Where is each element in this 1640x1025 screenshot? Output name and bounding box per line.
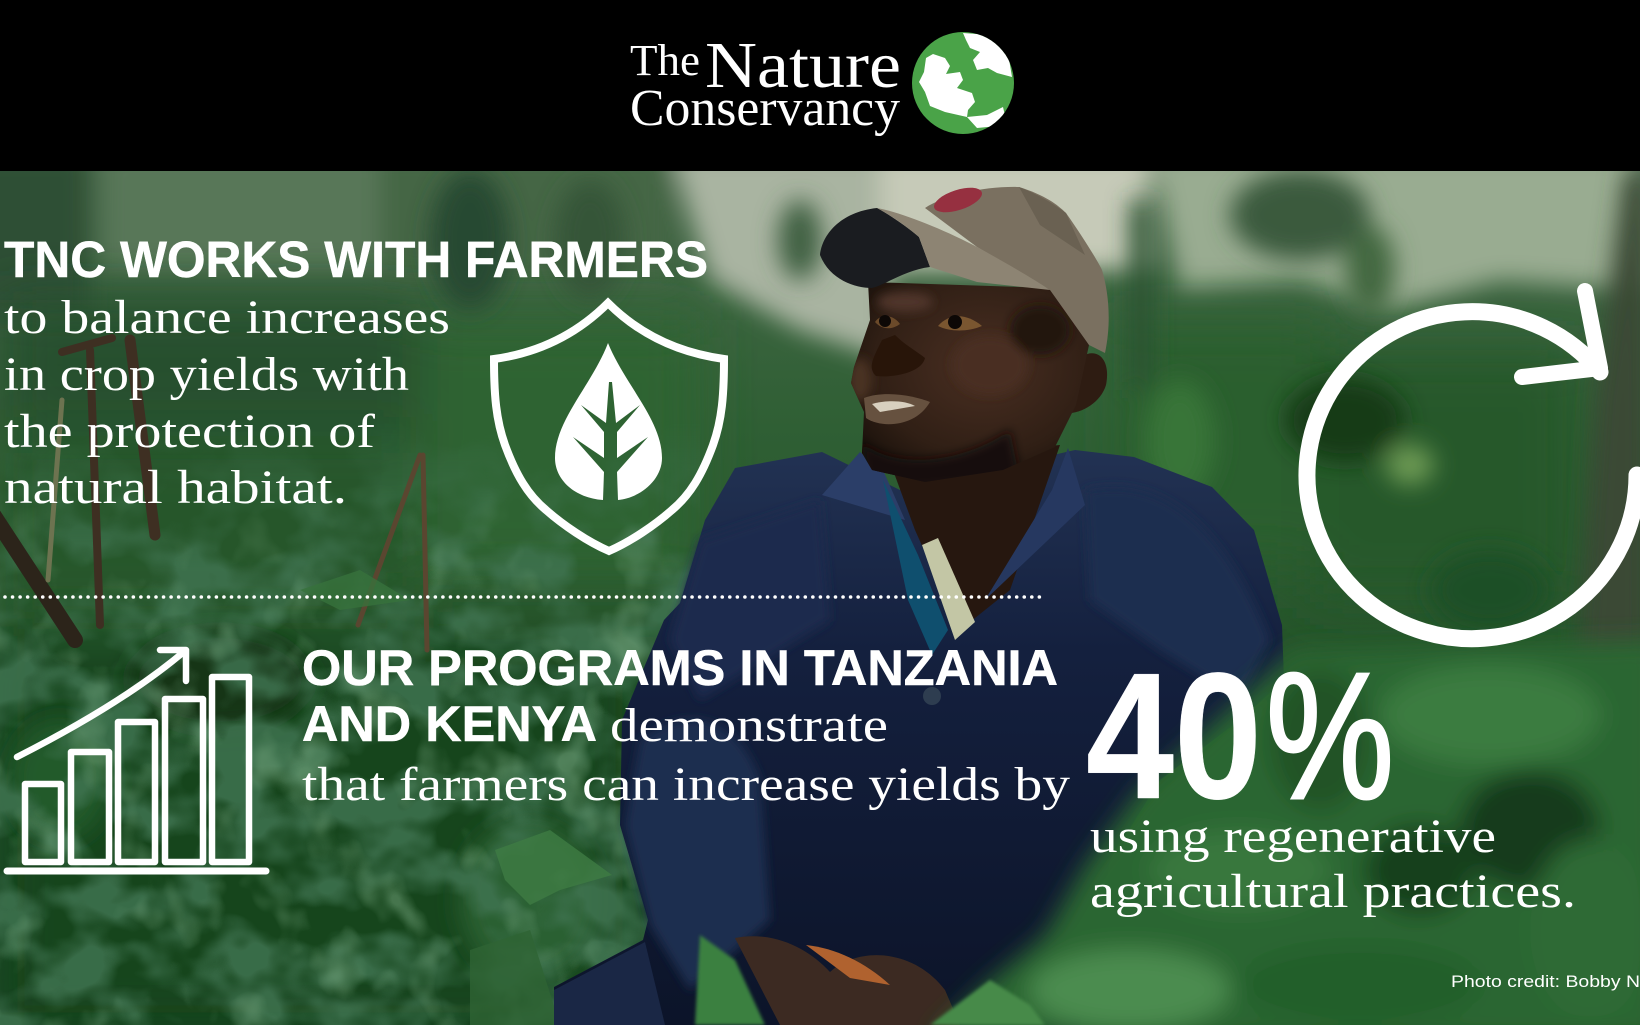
text block: balance yields and habitat [4, 291, 450, 514]
photo credit: Photo credit: Bobby N [1451, 972, 1640, 991]
crisp leaves [300, 570, 612, 1025]
logo: The Nature Conservancy: Nature [705, 29, 901, 102]
stakes [0, 338, 427, 650]
icon: shield with leaf [494, 303, 724, 551]
collar [822, 452, 905, 520]
logo: The Nature Conservancy: Conservancy [630, 80, 900, 137]
divider: dotted line [5, 595, 1040, 599]
heading: TNC works with farmers: TNC WORKS WITH FARMERS [4, 231, 708, 288]
text block: programs in Tanzania and Kenya: OUR PROGRAMS IN TANZANIA [302, 640, 1058, 696]
cap [820, 183, 1109, 353]
text block: balance yields and habitat: natural habitat. [4, 461, 347, 514]
text block: regenerative practices: agricultural practices. [1090, 865, 1576, 918]
neck [890, 445, 1060, 630]
farmer [554, 183, 1284, 1025]
shirt placket [883, 480, 948, 655]
text block: regenerative practices: using regenerative [1090, 810, 1496, 863]
ear [1072, 353, 1108, 413]
text block: programs in Tanzania and Kenya [302, 640, 1070, 811]
logo: The Nature Conservancy [630, 29, 1014, 137]
icon: circular arrow [1307, 291, 1637, 639]
statistic: 40%: 40 [1086, 636, 1262, 837]
text block: programs in Tanzania and Kenya: demonstrate [610, 699, 888, 752]
lit sleeve and shoulder [625, 487, 1270, 990]
button [923, 687, 941, 705]
statistic: 40%: % [1266, 636, 1394, 837]
text block: balance yields and habitat: to balance increases [4, 291, 450, 344]
head [851, 282, 1089, 482]
icon: rising bar chart [7, 650, 266, 871]
logo: The Nature Conservancy: The [630, 36, 700, 85]
foreground foliage [695, 640, 1640, 1025]
header bar [0, 0, 1640, 171]
text block: programs in Tanzania and Kenya: AND KENYA [302, 696, 597, 752]
text block: balance yields and habitat: the protection of [4, 405, 375, 458]
text block: balance yields and habitat: in crop yields with [4, 348, 409, 401]
body [554, 450, 1284, 1025]
hands [735, 936, 960, 1025]
eyes [875, 316, 900, 328]
mottled foliage texture, lower field [0, 420, 700, 1025]
text block: regenerative practices [1090, 810, 1576, 918]
statistic: 40% [1086, 636, 1394, 837]
nose and mouth [872, 335, 925, 376]
text block: programs in Tanzania and Kenya: that farmers can increase yields by [302, 758, 1070, 811]
